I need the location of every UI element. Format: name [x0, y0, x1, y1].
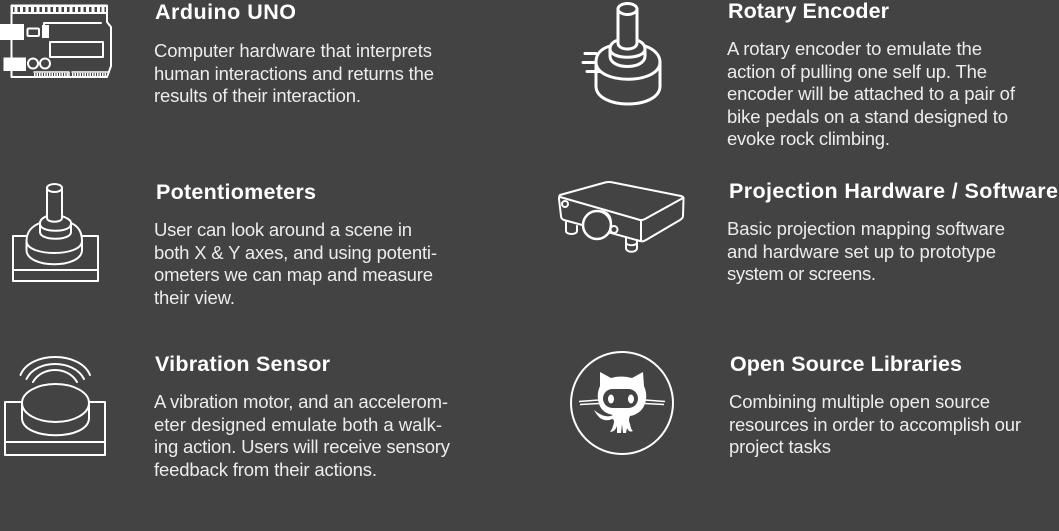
text: Potentiometers description: their view.: [154, 287, 235, 308]
text: Open Source description: project tasks: [729, 436, 831, 457]
icon: vibration sensor: [5, 357, 105, 455]
heading: Projection Hardware / Software: Projection Hardware / Software: [729, 179, 1058, 203]
text: Arduino description: Computer hardware that interprets: [154, 40, 432, 61]
icon: projector: [559, 182, 684, 252]
heading: Potentiometers: Potentiometers: [156, 180, 316, 204]
icon: github octocat in circle: [571, 352, 673, 454]
text: Rotary Encoder description: [727, 38, 1016, 149]
text: Arduino description: [154, 40, 434, 106]
text: Open Source description: Combining multiple open source: [729, 391, 990, 412]
text: Rotary Encoder description: A rotary encoder to emulate the: [727, 38, 982, 59]
text: Projection description: and hardware set up to prototype: [727, 241, 996, 262]
text: Potentiometers description: User can look around a scene in: [154, 219, 412, 240]
text: Arduino description: human interactions and returns the: [154, 63, 434, 84]
text: Vibration Sensor description: eter designed emulate both a walk-: [154, 414, 442, 435]
text: Potentiometers description: [154, 219, 437, 308]
icon: arduino board: [0, 6, 111, 77]
text: Rotary Encoder description: encoder will be attached to a pair of: [727, 83, 1016, 104]
text: Rotary Encoder description: action of pulling one self up. The: [727, 61, 987, 82]
text: Vibration Sensor description: [154, 391, 451, 480]
text: Potentiometers description: ometers we can map and measure: [154, 264, 433, 285]
text: Open Source description: resources in order to accomplish our: [729, 414, 1021, 435]
text: Projection description: Basic projection mapping software: [727, 218, 1005, 239]
text: Open Source description: [729, 391, 1021, 457]
text: Projection description: system or screens.: [727, 263, 876, 284]
text: Projection description: [727, 218, 1005, 284]
heading: Arduino UNO: Arduino UNO: [155, 0, 296, 24]
text: Vibration Sensor description: ing action. Users will receive sensory: [154, 436, 451, 457]
text: Vibration Sensor description: A vibration motor, and an accelerom-: [154, 391, 448, 412]
text: Vibration Sensor description: feedback from their actions.: [154, 459, 377, 480]
icon: potentiometer: [13, 184, 98, 281]
heading: Vibration Sensor: Vibration Sensor: [155, 352, 331, 376]
text: Arduino description: results of their interaction.: [154, 85, 361, 106]
text: Potentiometers description: both X & Y axes, and using potenti-: [154, 242, 437, 263]
icon: rotary encoder: [583, 4, 660, 104]
text: Rotary Encoder description: evoke rock climbing.: [727, 128, 890, 149]
heading: Open Source Libraries: Open Source Libraries: [730, 352, 962, 376]
text: Rotary Encoder description: bike pedals on a stand designed to: [727, 106, 1008, 127]
